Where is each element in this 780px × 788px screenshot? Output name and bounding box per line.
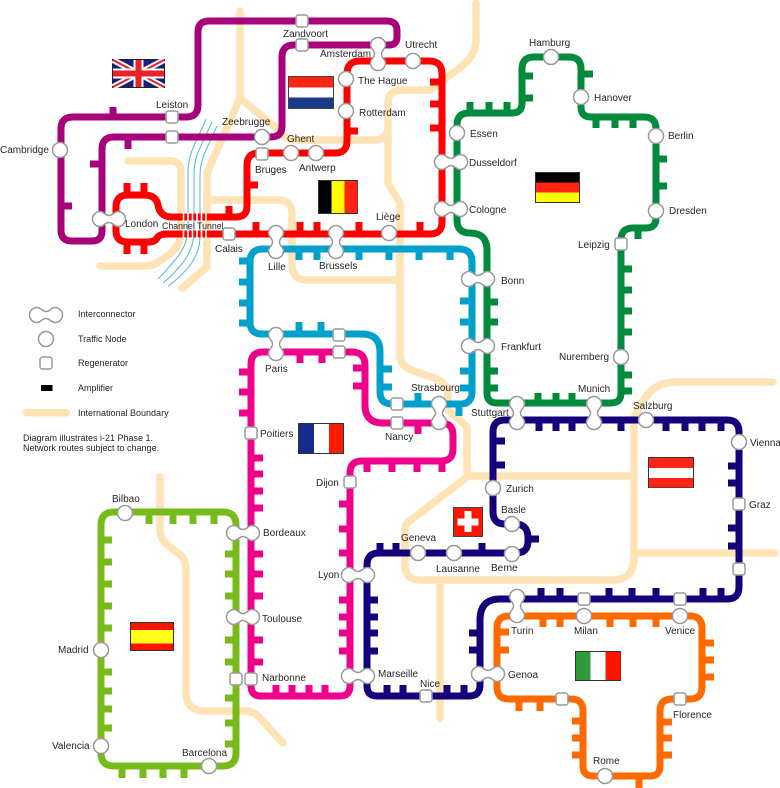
station labels: Dijon	[316, 478, 339, 489]
station labels: Stuttgart	[471, 408, 509, 419]
legend: interconnector	[30, 308, 136, 322]
station labels: London	[125, 219, 158, 230]
station labels: Nuremberg	[559, 352, 609, 363]
legend: international boundary: International Boundary	[78, 408, 169, 418]
station labels: Zurich	[506, 484, 534, 495]
station labels: Genoa	[508, 670, 538, 681]
station labels: Brussels	[319, 261, 357, 272]
flag: Italy	[576, 652, 620, 680]
flag: Spain	[130, 622, 174, 650]
legend: interconnector: Interconnector	[78, 309, 136, 319]
UK and Benelux red route	[116, 61, 442, 254]
station labels: Graz	[749, 500, 771, 511]
station labels: Barcelona	[182, 748, 227, 759]
station labels: Toulouse	[262, 614, 302, 625]
station labels: Dusseldorf	[469, 158, 517, 169]
channel tunnel waterways	[158, 119, 217, 286]
legend: traffic node: Traffic Node	[78, 334, 127, 344]
channel tunnel stripes	[184, 213, 206, 238]
station labels: Poitiers	[260, 429, 293, 440]
station labels: Strasbourg	[411, 383, 460, 394]
station labels: Marseille	[378, 669, 418, 680]
station labels: Amsterdam	[320, 49, 371, 60]
station labels: Calais	[215, 244, 243, 255]
interconnectors	[92, 38, 602, 684]
regenerators	[166, 15, 745, 705]
station labels: Valencia	[52, 741, 90, 752]
legend: note	[23, 433, 159, 453]
France pink route	[239, 352, 453, 696]
station labels: Ghent	[287, 134, 314, 145]
legend: amplifier	[41, 383, 113, 393]
station labels: Leipzig	[578, 240, 610, 251]
flag: Austria	[648, 458, 694, 488]
station labels: Turin	[511, 626, 533, 637]
station labels: Narbonne	[262, 673, 306, 684]
flag: Switzerland	[454, 508, 482, 536]
UK purple route	[61, 21, 397, 241]
station labels: Hamburg	[529, 38, 570, 49]
station labels: Hanover	[594, 93, 632, 104]
station labels: Rotterdam	[359, 108, 406, 119]
legend: regenerator: Regenerator	[78, 358, 128, 368]
station labels: Liège	[376, 212, 401, 223]
legend: international boundary	[23, 408, 169, 418]
station labels: Bilbao	[112, 494, 140, 505]
legend: note: Diagram illustrates i-21 Phase 1.	[23, 433, 153, 443]
station labels: Lille	[268, 262, 286, 273]
station labels: Milan	[574, 626, 598, 637]
station labels: Leiston	[156, 100, 188, 111]
legend: note: Network routes subject to change.	[23, 443, 159, 453]
station labels: Zandvoort	[283, 29, 328, 40]
station labels: Geneva	[401, 533, 436, 544]
station labels: Basle	[501, 505, 526, 516]
station labels: Paris	[265, 364, 288, 375]
station labels: Rome	[593, 756, 620, 767]
navy route	[367, 420, 739, 696]
station labels: Lyon	[318, 570, 339, 581]
station labels: Lausanne	[436, 564, 480, 575]
station labels: Cologne	[469, 205, 507, 216]
flag: France	[298, 424, 344, 454]
station labels: Antwerp	[299, 163, 336, 174]
station labels: Florence	[673, 710, 712, 721]
legend: traffic node	[38, 332, 127, 346]
flag: Belgium	[318, 180, 358, 214]
legend: regenerator	[40, 357, 128, 369]
station labels: Essen	[470, 129, 498, 140]
station labels: Channel Tunnel	[162, 221, 224, 231]
Italy orange route	[497, 616, 714, 788]
Spain green route	[101, 512, 236, 778]
Germany green route	[457, 57, 667, 403]
station labels: Bordeaux	[263, 528, 306, 539]
legend: amplifier: Amplifier	[78, 383, 113, 393]
station labels: Munich	[578, 384, 610, 395]
flag: UK	[112, 60, 164, 88]
station labels: Berne	[491, 563, 518, 574]
station labels: Frankfurt	[501, 342, 541, 353]
station labels: Berlin	[668, 131, 694, 142]
station labels: Madrid	[58, 645, 89, 656]
flag: Netherlands	[288, 76, 334, 108]
station labels: The Hague	[358, 76, 408, 87]
flag: Germany	[536, 172, 580, 202]
station labels: Utrecht	[405, 40, 437, 51]
station labels: Cambridge	[0, 145, 49, 156]
station labels: Venice	[665, 626, 695, 637]
station labels: Salzburg	[633, 401, 672, 412]
station labels: Bonn	[501, 276, 524, 287]
station labels: Nancy	[385, 432, 413, 443]
station labels: Bruges	[255, 165, 287, 176]
blue route	[239, 249, 472, 416]
station labels: Dresden	[669, 206, 707, 217]
station labels: Zeebrugge	[222, 117, 271, 128]
station labels: Nice	[420, 679, 440, 690]
legend	[23, 308, 169, 453]
